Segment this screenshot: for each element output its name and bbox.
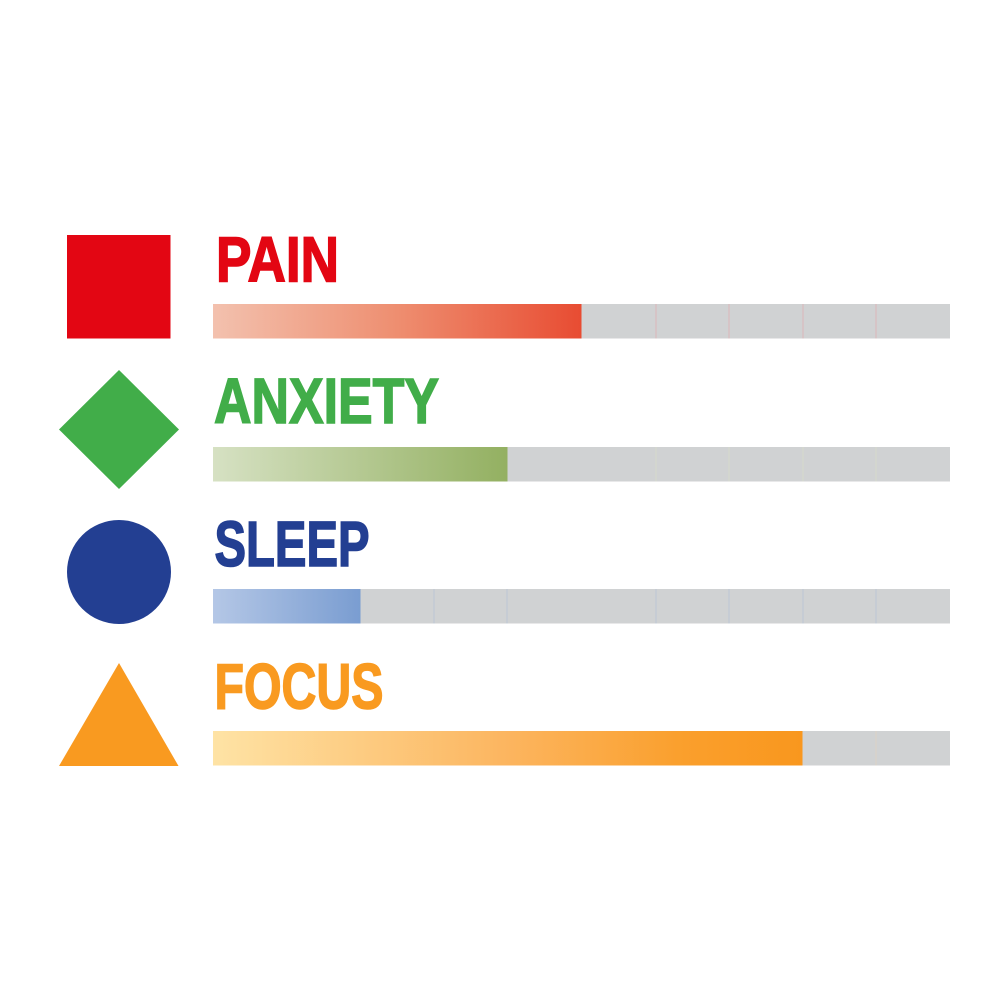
heading: sleep: SLEEP — [214, 508, 370, 580]
bar: pain — [213, 304, 950, 338]
heading: pain: PAIN — [216, 224, 339, 296]
icon: blue circle — [67, 520, 171, 624]
bar: focus — [213, 731, 950, 766]
icon: green diamond — [59, 370, 179, 489]
row: pain — [67, 224, 950, 338]
heading: focus: FOCUS — [214, 650, 384, 722]
icon: orange triangle — [59, 663, 178, 766]
row: focus — [59, 650, 950, 766]
icon: red square — [67, 235, 170, 338]
row: anxiety — [59, 365, 950, 489]
row: sleep — [67, 508, 950, 624]
bar: sleep — [213, 589, 950, 624]
bar: anxiety — [213, 447, 950, 482]
heading: anxiety: ANXIETY — [214, 365, 439, 437]
